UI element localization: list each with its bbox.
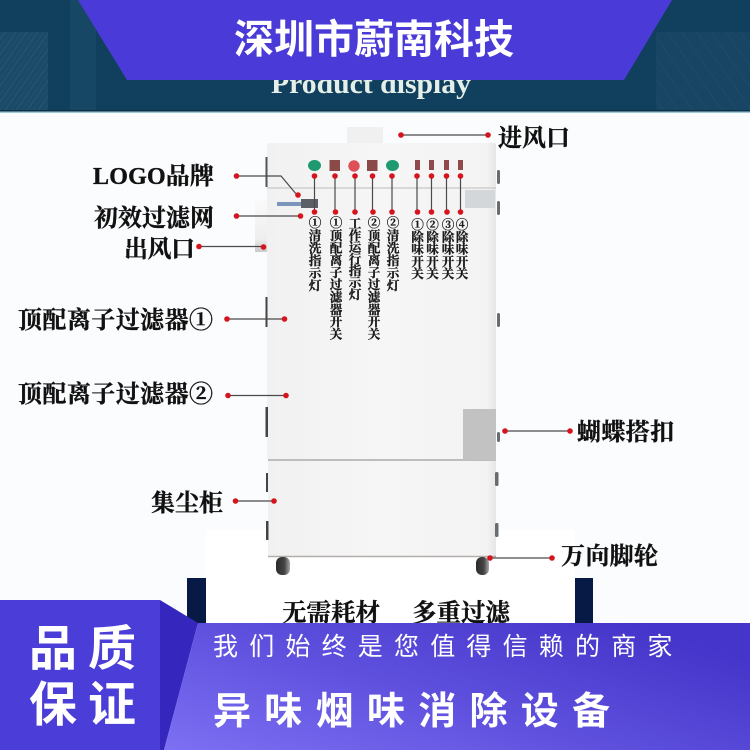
lower product card backdrop: [187, 530, 593, 625]
spec plate lower: [463, 409, 496, 460]
callout: top ion filter 1: [18, 306, 287, 334]
callout: top ion filter 1: 顶配离子过滤器①: [18, 306, 213, 334]
vertical label: deodorize switch 2: 开: [426, 255, 439, 269]
vertical label: deodorize switch 3: ③: [442, 218, 455, 232]
vertical label: cleaning light 2: 指: [387, 253, 400, 268]
vertical label: deodorize switch 1: ①: [411, 218, 424, 232]
vertical label: top ion filter switch 2: 过: [368, 277, 381, 292]
callout: butterfly latch: [502, 419, 674, 446]
badge text: [29, 623, 147, 732]
vertical label: cleaning light 1: 清: [309, 228, 322, 243]
vertical label: top ion filter switch 2: 顶: [368, 228, 382, 243]
title: 深圳市蔚南科技: [234, 18, 514, 62]
vertical label: deodorize switch 4: 除: [456, 230, 470, 244]
vertical label: cleaning light 2: 洗: [387, 240, 400, 256]
callout: air inlet: 进风口: [498, 125, 570, 152]
vertical label: deodorize switch 1: 关: [411, 266, 424, 281]
callout: LOGO brand: [93, 163, 301, 198]
quality badge panel: [0, 600, 160, 750]
vertical label: running light: 灯: [348, 287, 362, 302]
vertical label: top ion filter switch 1: 关: [330, 326, 343, 341]
vertical label: deodorize switch 2: 除: [426, 230, 440, 244]
callout: air outlet: [124, 236, 266, 263]
vertical label: running light: 运: [349, 241, 363, 255]
vertical label: deodorize switch 3: 关: [442, 266, 455, 281]
callout: primary filter: [94, 205, 303, 232]
vertical label: top ion filter switch 2: 离: [368, 253, 381, 268]
vertical label: deodorize switch 4: 开: [456, 255, 469, 269]
callout: LOGO brand: LOGO品牌: [93, 163, 214, 190]
vertical label: top ion filter switch 2: 子: [368, 266, 381, 280]
vertical label: top ion filter switch 1: ①: [330, 216, 343, 230]
callout: air outlet: 出风口: [124, 236, 195, 263]
product name: 异味烟味消除设备: [213, 691, 623, 733]
badge fold: [160, 600, 198, 750]
vertical label: running light: 指: [349, 263, 362, 278]
vertical label: cleaning light 2: 示: [387, 266, 401, 280]
leader lines: control panel: [312, 173, 463, 215]
vertical label: running light: 作: [349, 228, 362, 243]
spec plate upper: [465, 190, 495, 208]
logo mark: [277, 199, 318, 208]
main gradient bar: [164, 623, 750, 750]
dust cabinet: [268, 461, 496, 556]
badge text: 保证: [29, 679, 147, 732]
vertical label: top ion filter switch 1: 开: [330, 315, 343, 329]
callout: dust cabinet: 集尘柜: [151, 490, 223, 517]
vertical label: deodorize switch 2: 味: [426, 243, 439, 257]
vertical label: cleaning light 2: ②: [387, 216, 400, 230]
caption: no consumables, multiple filtration: [282, 599, 512, 627]
badge text: 品质: [29, 623, 147, 676]
vertical label: cleaning light 1: 洗: [309, 240, 322, 256]
vertical label: cleaning light 1: ①: [309, 216, 322, 230]
vertical label: top ion filter switch 2: 配: [368, 240, 381, 255]
vertical label: cleaning light 2: 灯: [386, 278, 400, 293]
callout: top ion filter 2: 顶配离子过滤器②: [18, 380, 213, 408]
vertical label: cleaning light 2: 清: [387, 228, 400, 243]
vertical label: running light: 示: [349, 276, 363, 290]
callout: air inlet: [398, 125, 570, 152]
upper cabinet: [267, 143, 496, 460]
vertical label: cleaning light 1: 示: [309, 266, 323, 280]
caption: no consumables, multiple filtration: 无需耗材: [282, 599, 380, 627]
caster wheels: [276, 557, 489, 575]
vertical label: top ion filter switch 1: 配: [330, 240, 343, 255]
vertical label: deodorize switch 3: 味: [442, 243, 455, 257]
side latches: [495, 170, 500, 537]
top header background: [0, 0, 750, 113]
vertical label: top ion filter switch 1: 滤: [330, 290, 344, 304]
cabinet seams: [267, 187, 496, 189]
outlet duct: [255, 200, 267, 252]
callout: universal casters: 万向脚轮: [561, 543, 658, 570]
callout: dust cabinet: [151, 490, 277, 517]
vertical label: cleaning light 1: 指: [309, 253, 322, 268]
vertical label: deodorize switch 2: ②: [426, 218, 439, 232]
inlet duct: [347, 127, 383, 144]
vertical label: top ion filter switch 2: ②: [368, 216, 381, 230]
vertical label: running light: 工: [349, 217, 362, 231]
control panel lights and switches: [308, 160, 463, 172]
machine illustration: [255, 127, 500, 575]
vertical label: top ion filter switch 2: 关: [368, 326, 381, 341]
vertical label: top ion filter switch 2: 开: [368, 315, 381, 329]
title banner: [78, 0, 672, 80]
callout: butterfly latch: 蝴蝶搭扣: [577, 419, 674, 446]
vertical label: deodorize switch 2: 关: [426, 266, 439, 281]
vertical label: deodorize switch 1: 除: [411, 230, 425, 244]
slogan: 我们始终是您值得信赖的商家: [213, 633, 684, 661]
vertical label: top ion filter switch 1: 过: [330, 277, 343, 292]
vertical label: running light: 行: [349, 252, 362, 266]
vertical label: deodorize switch 4: 关: [456, 266, 469, 281]
vertical label: top ion filter switch 1: 子: [330, 266, 343, 280]
vertical label: deodorize switch 4: 味: [456, 243, 469, 257]
bottom banner: [0, 600, 750, 750]
vertical label: top ion filter switch 2: 器: [368, 303, 381, 317]
vertical label: top ion filter switch 1: 顶: [330, 228, 344, 243]
vertical label: top ion filter switch 2: 滤: [368, 290, 382, 304]
vertical label: cleaning light 1: 灯: [308, 278, 322, 293]
caption: no consumables, multiple filtration: 多重过滤: [412, 599, 512, 627]
vertical label: top ion filter switch 1: 离: [330, 253, 343, 268]
vertical label: deodorize switch 1: 开: [411, 255, 424, 269]
callout: universal casters: [487, 543, 658, 570]
vertical label: deodorize switch 3: 除: [442, 230, 456, 244]
subtitle: Product display: Product display: [271, 69, 471, 100]
vertical label: deodorize switch 1: 味: [411, 243, 424, 257]
handles: [266, 157, 268, 540]
callout: primary filter: 初效过滤网: [94, 205, 214, 232]
callout: top ion filter 2: [18, 380, 289, 408]
vertical label: deodorize switch 4: ④: [456, 218, 469, 232]
vertical label: deodorize switch 3: 开: [442, 255, 455, 269]
vertical label: top ion filter switch 1: 器: [330, 303, 343, 317]
